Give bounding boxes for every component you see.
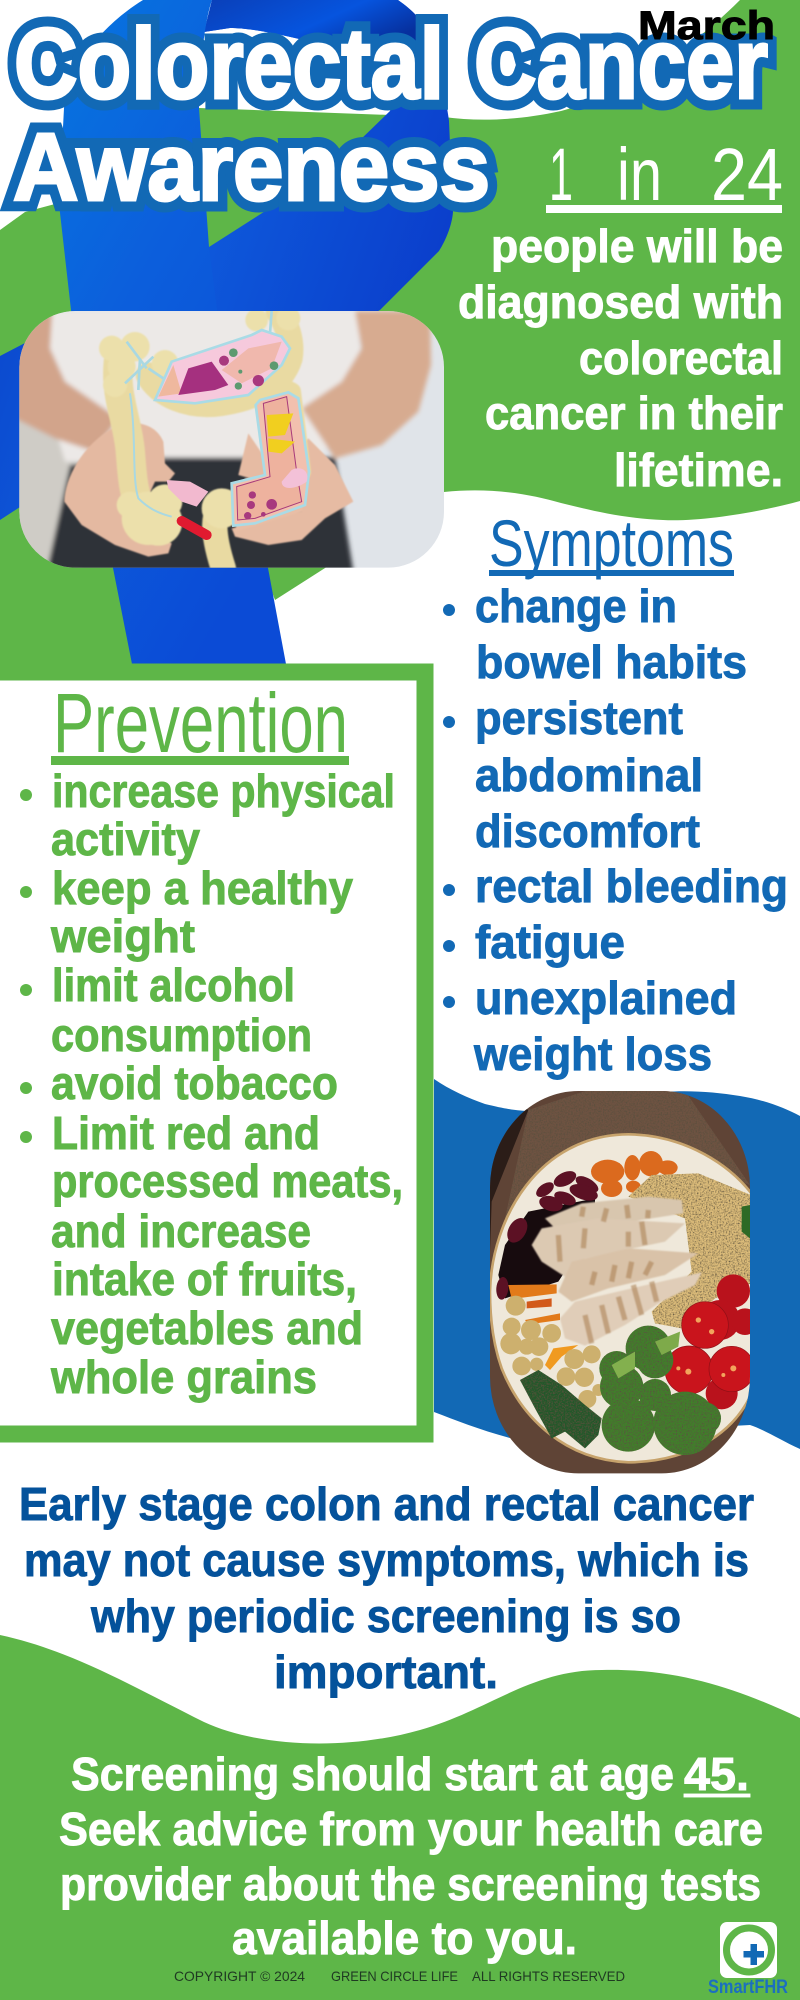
quinoa	[628, 1173, 755, 1328]
prevention heading: Prevention	[53, 676, 348, 770]
prevention list text: increase physical	[52, 765, 395, 817]
rectum flap	[167, 480, 208, 507]
copyright line: ALL RIGHTS RESERVED	[472, 1968, 625, 1984]
prevention list text: intake of fruits,	[52, 1253, 357, 1305]
red tip	[182, 521, 207, 535]
prevention list text: avoid tobacco	[51, 1057, 338, 1109]
panel: prevention box	[0, 672, 425, 1434]
screening advice: Screening should start at age	[71, 1748, 674, 1800]
prevention list text	[50, 765, 403, 1403]
symptoms list text: abdominal	[475, 749, 703, 801]
stat description	[458, 220, 783, 496]
title: Colorectal	[14, 8, 444, 120]
symptoms list text: discomfort	[475, 805, 700, 857]
title: Awareness	[13, 114, 490, 221]
prevention list text: vegetables and	[51, 1302, 363, 1354]
prevention list text: keep a healthy	[52, 862, 353, 914]
background: green bottom wave	[0, 1635, 800, 2000]
stat: 1 in 24: in	[617, 133, 662, 216]
stat description: colorectal	[579, 332, 783, 384]
prevention list text: consumption	[51, 1009, 312, 1061]
descending cut	[232, 392, 309, 526]
background: green upper right wave	[199, 0, 800, 600]
symptoms list text: fatigue	[475, 916, 625, 968]
symptoms list text: bowel habits	[476, 636, 747, 688]
title: Colorectal	[14, 8, 444, 120]
screening advice: available to you.	[232, 1912, 577, 1964]
copyright line: GREEN CIRCLE LIFE	[331, 1968, 458, 1984]
symptoms list text: persistent	[475, 692, 683, 744]
screening advice: provider about the screening tests	[60, 1858, 761, 1910]
plate	[490, 1134, 755, 1462]
stat: 1 in 24: 24	[711, 133, 783, 216]
symptoms list text: unexplained	[475, 972, 737, 1024]
prevention list text: Limit red and	[52, 1107, 320, 1159]
dark bean area	[498, 1198, 595, 1298]
awareness ribbon	[0, 0, 453, 664]
background: blue wave behind food photo	[434, 1079, 800, 1449]
screening advice: Seek advice from your health care	[59, 1803, 763, 1855]
stat description: diagnosed with	[458, 276, 783, 328]
early stage message: Early stage colon and rectal cancer	[19, 1478, 754, 1530]
stat description: people will be	[491, 220, 783, 272]
copyright line: COPYRIGHT © 2024	[174, 1968, 305, 1984]
icon: SmartFHR logo: SmartFHR	[708, 1977, 788, 1998]
early stage message: may not cause symptoms, which is	[24, 1534, 749, 1586]
symptoms heading: Symptoms	[489, 506, 734, 580]
prevention list text: and increase	[51, 1205, 311, 1257]
prevention list text: weight	[50, 910, 195, 962]
title	[13, 8, 768, 221]
symptoms list text: weight loss	[473, 1028, 712, 1080]
tomatoes	[706, 1274, 750, 1410]
prevention list text: limit alcohol	[52, 959, 295, 1011]
early stage message: important.	[274, 1646, 498, 1698]
March label: March	[638, 4, 775, 48]
chicken slices	[532, 1197, 702, 1346]
prevention list text: activity	[51, 813, 200, 865]
photo: hands holding colon model	[19, 311, 444, 568]
prevention list bullets	[20, 789, 32, 1143]
icon: SmartFHR logo	[708, 1922, 788, 1998]
early stage message	[19, 1478, 754, 1698]
symptoms list text: rectal bleeding	[475, 860, 788, 912]
symptoms list bullets	[443, 604, 455, 1008]
background: green left area	[0, 200, 140, 664]
prevention list text: processed meats,	[52, 1155, 403, 1207]
broccoli	[599, 1326, 721, 1455]
prevention list text: whole grains	[50, 1351, 317, 1403]
carrots	[591, 1151, 678, 1197]
stat description: cancer in their	[485, 387, 783, 439]
chickpeas	[500, 1296, 604, 1408]
stat: 1 in 24: 1	[549, 133, 573, 216]
screening advice: 45.	[684, 1748, 749, 1800]
stat description: lifetime.	[614, 444, 783, 496]
screening advice	[59, 1748, 763, 1964]
early stage message: why periodic screening is so	[90, 1590, 681, 1642]
copyright line	[174, 1968, 625, 1984]
peppers	[508, 1284, 578, 1370]
photo: food bowl	[490, 1091, 750, 1474]
stat: 1 in 24	[546, 133, 783, 216]
symptoms list text: change in	[475, 580, 677, 632]
symptoms list text	[473, 580, 788, 1080]
transverse cut	[155, 330, 290, 403]
title: Awareness	[13, 114, 490, 221]
kale	[520, 1370, 602, 1448]
beans	[495, 1168, 601, 1300]
